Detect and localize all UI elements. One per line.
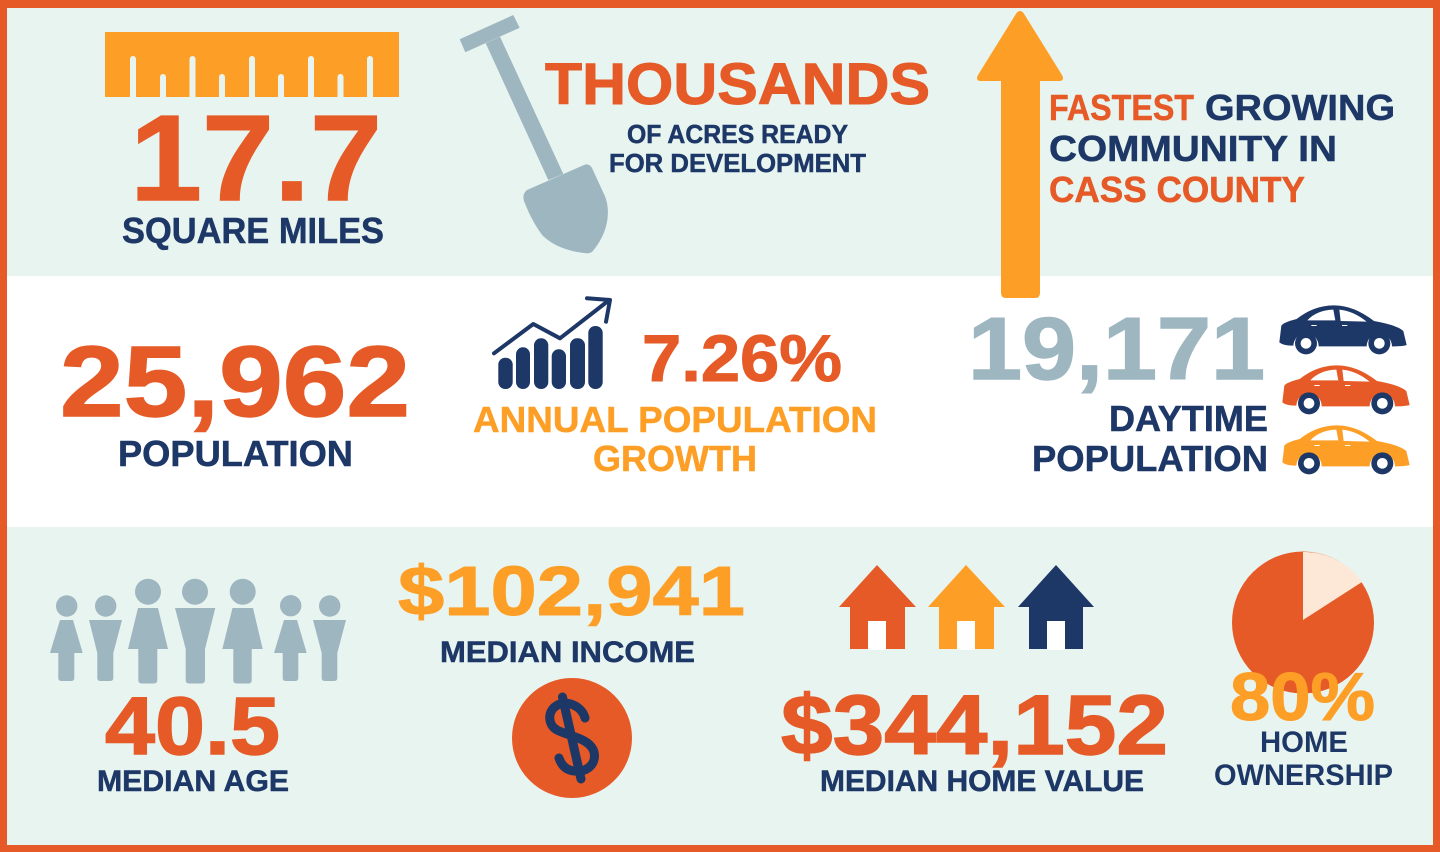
panel: development acres bbox=[460, 15, 930, 253]
icon: red car bbox=[1282, 365, 1410, 414]
stat: 19,171: 19,171 bbox=[968, 299, 1265, 398]
label: home: HOME bbox=[1260, 726, 1348, 759]
stat: 80%: 80% bbox=[1230, 659, 1375, 735]
icon: orange house bbox=[928, 565, 1005, 650]
label: growth: GROWTH bbox=[593, 438, 757, 479]
label: population: POPULATION bbox=[1032, 438, 1268, 479]
stat: $344,152: $344,152 bbox=[781, 678, 1168, 772]
panel: median age bbox=[50, 579, 346, 798]
text: fastest: FASTEST bbox=[1049, 87, 1194, 128]
panel: daytime population bbox=[968, 299, 1410, 479]
stat: 25,962: 25,962 bbox=[60, 326, 410, 438]
text: of acres ready: OF ACRES READY bbox=[627, 119, 848, 149]
icon: shovel bbox=[460, 15, 608, 253]
icon: red house bbox=[839, 565, 916, 650]
label: annual population: ANNUAL POPULATION bbox=[473, 399, 877, 440]
text: community in: COMMUNITY IN bbox=[1049, 128, 1337, 169]
label: square miles: SQUARE MILES bbox=[122, 210, 384, 251]
icon: navy car bbox=[1279, 305, 1407, 354]
panel: population bbox=[60, 326, 410, 474]
panel: land area bbox=[105, 32, 399, 251]
stat: 17.7: 17.7 bbox=[130, 90, 382, 226]
text: cass county: CASS COUNTY bbox=[1049, 169, 1305, 210]
label: median home value: MEDIAN HOME VALUE bbox=[820, 765, 1144, 798]
stat: 40.5: 40.5 bbox=[105, 681, 280, 772]
icon: bar chart with rising arrow bbox=[494, 298, 610, 389]
icon: ruler bbox=[105, 32, 399, 97]
panel: home ownership bbox=[1214, 552, 1393, 792]
stat: $102,941: $102,941 bbox=[398, 552, 745, 630]
label: ownership: OWNERSHIP bbox=[1214, 759, 1393, 792]
heading: thousands: THOUSANDS bbox=[545, 52, 930, 117]
top band background bbox=[7, 8, 1433, 276]
text: growing: GROWING bbox=[1205, 87, 1395, 128]
panel: annual growth bbox=[473, 298, 877, 479]
icon: navy house bbox=[1018, 565, 1094, 650]
panel: median home value bbox=[781, 565, 1168, 798]
icon: up arrow bbox=[977, 11, 1063, 298]
stat: 7.26%: 7.26% bbox=[642, 321, 842, 395]
label: median age: MEDIAN AGE bbox=[97, 765, 289, 798]
middle band background bbox=[7, 276, 1433, 527]
icon: dollar coin bbox=[512, 678, 632, 798]
panel: fastest growing bbox=[977, 11, 1395, 298]
label: population: POPULATION bbox=[118, 433, 353, 474]
bottom band background bbox=[7, 527, 1433, 845]
label: median income: MEDIAN INCOME bbox=[440, 636, 695, 669]
text: for development: FOR DEVELOPMENT bbox=[609, 148, 866, 178]
icon: orange car bbox=[1282, 425, 1410, 474]
label: daytime: DAYTIME bbox=[1109, 398, 1268, 439]
chart: ownership pie bbox=[1232, 552, 1374, 694]
icon: row of people bbox=[50, 579, 346, 684]
panel: median income bbox=[398, 552, 745, 798]
